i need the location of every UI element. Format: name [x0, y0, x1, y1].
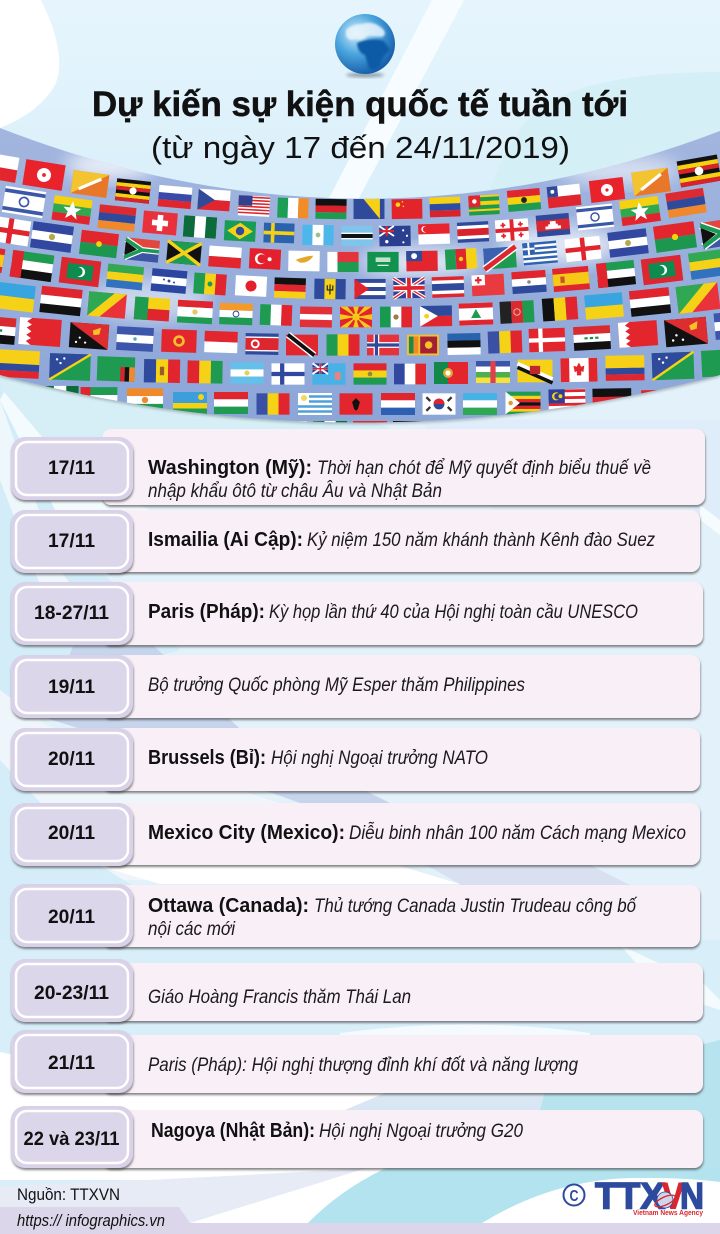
event text: Brussels (Bỉ): — [148, 747, 266, 769]
event text — [148, 529, 655, 551]
event text: Diễu binh nhân 100 năm Cách mạng Mexico — [349, 823, 686, 844]
flags row 8 — [41, 386, 679, 415]
event row 10 — [11, 1106, 703, 1168]
event text — [148, 822, 686, 844]
banner: world flags — [0, 120, 720, 443]
event text — [148, 747, 488, 769]
logo: TTXVN: TTX — [595, 1176, 665, 1216]
logo: TTXVN: V — [662, 1176, 684, 1216]
event text: Kỷ niệm 150 năm khánh thành Kênh đào Suez — [307, 530, 655, 551]
event text: Paris (Pháp): — [148, 601, 265, 623]
event text: Bộ trưởng Quốc phòng Mỹ Esper thăm Philippines — [148, 675, 525, 696]
icon: globe — [335, 14, 395, 78]
event text: Paris (Pháp): Hội nghị thượng đỉnh khí đốt và năng lượng — [148, 1055, 578, 1076]
event text — [148, 601, 638, 623]
event text: nội các mới — [148, 919, 236, 940]
flags row 6 — [0, 310, 720, 356]
event row 2 — [11, 510, 700, 573]
event text: Ismailia (Ai Cập): — [148, 529, 303, 551]
event text: Mexico City (Mexico): — [148, 822, 345, 844]
event row 3 — [11, 582, 703, 645]
event text: Washington (Mỹ): — [148, 457, 312, 479]
event row 4 — [11, 655, 700, 718]
date: 20/11 — [48, 907, 95, 928]
event text — [148, 895, 637, 940]
website: https:// infographics.vn — [17, 1211, 165, 1230]
flags row 1 — [0, 151, 720, 219]
date: 20/11 — [48, 749, 95, 770]
event text: Ottawa (Canada): — [148, 895, 309, 917]
event text: Hội nghị Ngoại trưởng G20 — [319, 1121, 523, 1142]
date: 20-23/11 — [34, 983, 109, 1004]
event text: nhập khẩu ôtô từ châu Âu và Nhật Bản — [148, 480, 442, 502]
event text — [151, 1120, 523, 1142]
date: 19/11 — [48, 677, 95, 698]
event text: Nagoya (Nhật Bản): — [151, 1120, 315, 1142]
event row 5 — [11, 728, 700, 791]
event row 1 — [11, 429, 705, 505]
event text: Thời hạn chót để Mỹ quyết định biểu thuế về — [317, 458, 651, 479]
flags row 5 — [0, 281, 720, 328]
date: 17/11 — [48, 458, 95, 479]
flags row 9 — [299, 421, 422, 422]
title: Dự kiến sự kiện quốc tế tuần tới — [92, 85, 628, 124]
event text: Hội nghị Ngoại trưởng NATO — [271, 748, 488, 769]
date: 18-27/11 — [34, 603, 109, 624]
event text — [148, 457, 651, 502]
flags row 7 — [0, 349, 720, 385]
event row 9 — [11, 1030, 703, 1093]
event row 8 — [11, 959, 703, 1022]
logo: TTXVN: C — [570, 1188, 579, 1205]
source: Nguồn: TTXVN — [17, 1185, 120, 1204]
event text: Kỳ họp lần thứ 40 của Hội nghị toàn cầu UNESCO — [269, 602, 638, 623]
logo: TTXVN: N — [680, 1176, 704, 1216]
flags row 3 — [0, 215, 720, 272]
date: 20/11 — [48, 823, 95, 844]
logo: TTXVN — [564, 1176, 704, 1217]
event row 6 — [11, 803, 700, 866]
flags row 4 — [0, 243, 720, 299]
flags row 2 — [2, 186, 707, 246]
event text: Giáo Hoàng Francis thăm Thái Lan — [148, 987, 411, 1008]
date: 22 và 23/11 — [24, 1129, 120, 1150]
subtitle: (từ ngày 17 đến 24/11/2019) — [151, 130, 570, 165]
event row 7 — [11, 884, 700, 947]
event text: Thủ tướng Canada Justin Trudeau công bố — [314, 896, 637, 917]
date: 21/11 — [48, 1053, 95, 1074]
logo: TTXVN: Vietnam News Agency — [633, 1210, 703, 1217]
date: 17/11 — [48, 531, 95, 552]
